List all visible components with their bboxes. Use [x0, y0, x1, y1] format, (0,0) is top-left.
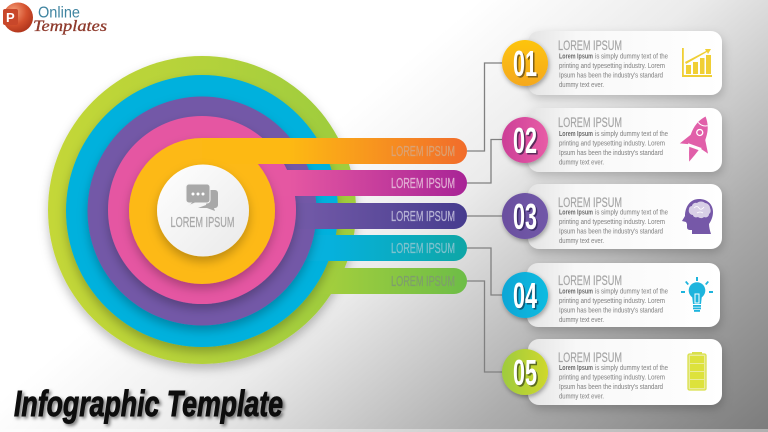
card text 03: Ipsum has been the industry's standard [559, 226, 663, 236]
connector 5 [467, 281, 505, 372]
card text 02: Ipsum has been the industry's standard [559, 148, 663, 157]
badge 01: 01 [513, 43, 537, 84]
card text 02 [558, 114, 668, 166]
card 02 [502, 108, 722, 172]
card text 03: printing and typesetting industry. Lorem [559, 217, 665, 226]
card text 04: dummy text ever. [559, 315, 604, 324]
badge 05 [502, 349, 548, 395]
card text 05: Lorem Ipsum [559, 363, 593, 372]
bar: yellow [202, 138, 467, 164]
card text 01: printing and typesetting industry. Lorem [559, 61, 665, 70]
card text 02: is simply dummy text of the [595, 129, 668, 138]
badge 02: 02 [514, 122, 538, 162]
badge 02 [502, 117, 548, 163]
ring: purple [88, 96, 316, 326]
card text 02: Lorem Ipsum [559, 129, 593, 138]
badge 05: 05 [513, 352, 537, 393]
badge 02: 02 [513, 120, 537, 161]
card text 04: LOREM IPSUM [558, 272, 622, 288]
connector 4 [467, 248, 505, 295]
card text 05 [558, 349, 668, 400]
badge 01: 01 [514, 44, 538, 86]
card text 01 [558, 37, 668, 89]
bar: blue [240, 235, 467, 261]
card text 01: dummy text ever. [559, 80, 604, 89]
card text 05: LOREM IPSUM [558, 349, 622, 365]
ring: lime [48, 56, 356, 364]
bar: yellow: LOREM IPSUM [391, 144, 455, 160]
icon: chat bubbles [186, 184, 218, 211]
ring: blue [66, 75, 338, 347]
card text 03: is simply dummy text of the [595, 208, 668, 216]
connector 2 [467, 140, 505, 183]
concentric ring diagram [48, 56, 467, 364]
card text 03: LOREM IPSUM [558, 194, 622, 210]
card text 04: Ipsum has been the industry's standard [559, 306, 663, 314]
bar: blue: LOREM IPSUM [391, 241, 455, 257]
card text 05: Ipsum has been the industry's standard [559, 382, 663, 391]
icon: rocket [675, 111, 720, 167]
icon: battery [688, 352, 706, 390]
icon: PowerPoint sphere: P [6, 10, 15, 25]
icon: light bulb [681, 277, 713, 312]
card 01 [502, 31, 722, 95]
logo: Online Templates [3, 2, 107, 35]
card text 03: Lorem Ipsum [559, 208, 593, 216]
ring: yellow [129, 138, 275, 284]
icon: bar chart [682, 48, 712, 77]
badge 05: 05 [514, 354, 538, 394]
bar: green [250, 268, 467, 294]
badge 03: 03 [513, 196, 537, 237]
bar: pink [220, 170, 467, 196]
card text 05: printing and typesetting industry. Lorem [559, 372, 665, 382]
ring: pink [108, 116, 296, 304]
card 05 [502, 339, 722, 405]
bar: pink: LOREM IPSUM [391, 176, 455, 192]
card text 04: printing and typesetting industry. Lorem [559, 296, 665, 305]
logo word: Online: Online [38, 4, 80, 22]
card text 05: is simply dummy text of the [595, 363, 668, 372]
badge 04: 04 [514, 276, 538, 318]
badge 04: 04 [513, 275, 537, 316]
card text 04: is simply dummy text of the [595, 286, 668, 296]
badge 03 [502, 193, 548, 239]
center label: LOREM IPSUM [170, 215, 234, 231]
badge 04 [502, 272, 548, 318]
card text 03: dummy text ever. [559, 236, 604, 245]
card text 03 [558, 194, 668, 245]
title: Infographic Template [14, 383, 283, 424]
card text 02: LOREM IPSUM [558, 114, 622, 130]
card 03 [502, 184, 722, 249]
bar: green: LOREM IPSUM [391, 274, 455, 290]
bar: purple [230, 203, 467, 229]
card text 02: printing and typesetting industry. Lorem [559, 138, 665, 148]
connector 3 [467, 215, 505, 217]
card 04 [502, 263, 720, 327]
card text 01: is simply dummy text of the [595, 52, 668, 60]
card text 01: Ipsum has been the industry's standard [559, 70, 663, 80]
icon: head with brain [682, 199, 713, 234]
card text 04: Lorem Ipsum [559, 286, 593, 296]
card text 04 [558, 272, 668, 324]
badge 03: 03 [514, 198, 538, 238]
card text 05: dummy text ever. [559, 392, 604, 400]
badge 01 [502, 40, 548, 86]
card text 01: Lorem Ipsum [559, 52, 593, 60]
bar: purple: LOREM IPSUM [391, 209, 455, 225]
logo word: Templates: Templates [33, 18, 107, 35]
center white disc [157, 164, 249, 256]
card text 01: LOREM IPSUM [558, 37, 622, 53]
connector 1 [467, 63, 505, 151]
card text 02: dummy text ever. [559, 158, 604, 166]
